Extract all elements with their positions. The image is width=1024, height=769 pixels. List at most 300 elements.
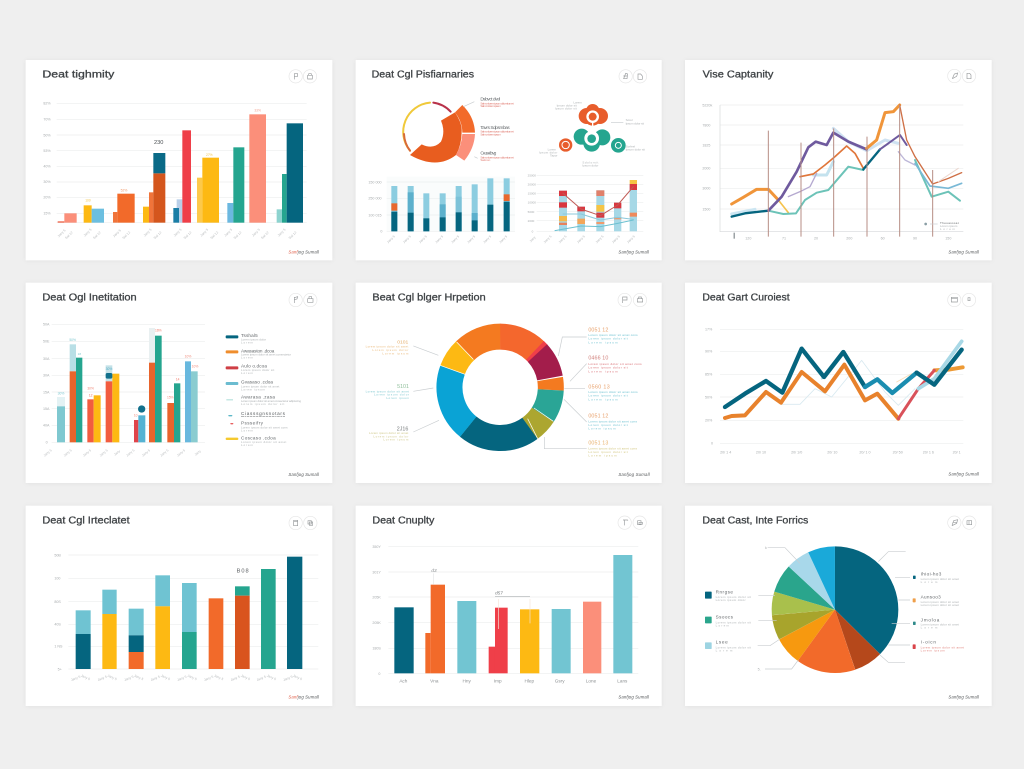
bar chart: Jany 5 bbox=[143, 228, 153, 238]
two-series line chart: 20/ 10 bbox=[756, 450, 766, 454]
callouts left: Lorem ipsum bbox=[383, 438, 409, 442]
stacked bar chart: Jany 5 bbox=[160, 674, 171, 681]
radial chart: Dsbvct dvel bbox=[480, 97, 500, 102]
panel: bottom-right pie chart bbox=[685, 506, 992, 706]
title: Deat Ogl Inetitation bbox=[42, 293, 137, 304]
panel: top-middle mixed charts bbox=[356, 60, 662, 260]
icon buttons bbox=[948, 293, 976, 307]
signature: Sanfjog Sumall bbox=[288, 472, 320, 477]
radial chart: Salmon lorem ipsum dolor sit amet bbox=[480, 101, 514, 105]
grouped bar chart: 30% bbox=[106, 367, 112, 371]
signature: Sanfjog Sumall bbox=[618, 472, 651, 477]
flower diagram: Ipsum dolor sit bbox=[555, 106, 577, 110]
signature: Sanfjog Sumall bbox=[948, 694, 980, 699]
legend right: Lorem ipsum dolor sit amet bbox=[921, 600, 959, 604]
icon buttons bbox=[948, 516, 976, 529]
legend right bbox=[913, 572, 964, 653]
legend right: Jmoloa bbox=[921, 617, 940, 622]
legend right: Ihioi-ho3 bbox=[921, 572, 942, 577]
bar chart: Sat 12 bbox=[183, 230, 193, 240]
stacked bar chart: Jany 5 bbox=[177, 675, 187, 682]
stacked bar chart: Jany 5 bbox=[466, 234, 476, 244]
bar chart: Jany 5 bbox=[277, 228, 287, 238]
stacked bar chart: Jany 5 bbox=[230, 675, 241, 682]
multi-line chart bbox=[702, 103, 963, 240]
callouts right: Lorem ipsum bbox=[588, 454, 617, 458]
callouts right: 0466 10 bbox=[588, 356, 608, 362]
callouts right bbox=[544, 327, 642, 458]
legend right: Lorem ipsum bbox=[921, 649, 945, 653]
signature: Sanfjog Sumall bbox=[288, 249, 320, 254]
legend right: Lorem ipsum dolor sit amet bbox=[921, 577, 959, 581]
bar chart: Imp bbox=[494, 679, 502, 684]
legend right: Aunsoo3 bbox=[921, 595, 941, 600]
stacked bar chart: Jany 5 bbox=[402, 234, 412, 244]
stacked bar chart: 50B bbox=[54, 553, 61, 557]
grouped bar chart: 30A bbox=[43, 374, 50, 378]
legend: Lorem bbox=[241, 443, 253, 447]
title: Beat Cgl blger Hrpetion bbox=[372, 293, 486, 304]
title: Deat Gart Curoiest bbox=[702, 293, 790, 304]
bar chart: Sat 12 bbox=[64, 230, 74, 240]
bar chart: 40% bbox=[43, 164, 51, 168]
icon buttons bbox=[948, 69, 976, 83]
stacked bar chart: Jany 5 bbox=[203, 675, 214, 682]
stacked bar chart: Jany 5 bbox=[133, 674, 144, 681]
bar chart: 205K bbox=[372, 595, 381, 599]
callouts right: Lorem ipsum dolor sit bbox=[588, 423, 628, 427]
bar chart: 230 bbox=[154, 140, 163, 146]
stacked bar and line chart: 0 bbox=[532, 229, 534, 233]
multi-line chart: 200 bbox=[846, 236, 852, 240]
two-series line chart: 85% bbox=[705, 373, 713, 377]
callouts right: Lorem ipsum dolor sit bbox=[588, 366, 628, 370]
flower diagram bbox=[539, 101, 645, 167]
panel: bottom-centre bar chart bbox=[356, 506, 662, 706]
grouped bar chart: 50% bbox=[69, 338, 76, 342]
callouts right: Lorem ipsum bbox=[588, 427, 616, 431]
legend: Lorem ipsum dolor sit amet consectetur adipiscing bbox=[241, 399, 301, 403]
bar chart: Sat 12 bbox=[288, 230, 298, 240]
bar chart: Jany 5 bbox=[223, 228, 233, 238]
stacked bar chart: Jany 5 bbox=[418, 234, 428, 244]
stacked bar chart: Jany 5 bbox=[187, 674, 197, 681]
stacked bar chart: 100 015 bbox=[368, 213, 382, 217]
callouts left: 0101 bbox=[397, 339, 409, 345]
stacked bar and line chart: Jany 5 bbox=[543, 234, 553, 244]
grouped bar chart: Jany bbox=[194, 449, 202, 457]
bar chart: Vna bbox=[430, 679, 439, 684]
two-series line chart: 20/ 1 4 bbox=[720, 450, 731, 454]
grouped bar chart: 50A bbox=[43, 323, 50, 327]
grouped bar chart: Jany 5 bbox=[141, 448, 151, 458]
legend: Lorem ipsum dolor bbox=[241, 338, 266, 342]
stacked bar chart: 80S bbox=[54, 600, 61, 604]
stacked bar and line chart: Jany 5 bbox=[595, 234, 605, 244]
callouts right: Lorem ipsum bbox=[588, 369, 618, 373]
signature: Sanfjog Sumall bbox=[948, 471, 980, 476]
two-series line chart: 20% bbox=[705, 419, 713, 423]
bar chart: d57 bbox=[495, 591, 503, 596]
callouts left: Lorem ipsum dolor bbox=[372, 348, 408, 352]
legend: Lorem ipsum dolor sit amet cons bbox=[241, 425, 288, 429]
bar chart: Jany 5 bbox=[251, 228, 261, 238]
two-series line chart: 20/ 1 0 bbox=[859, 450, 871, 454]
legend right: Lorem ipsum dolor sit amet bbox=[921, 603, 959, 607]
bar chart: Hlep bbox=[525, 679, 535, 684]
legend left: Lorem bbox=[716, 623, 729, 627]
grouped bar chart: 30A bbox=[43, 357, 50, 361]
bar chart: 50% bbox=[43, 133, 51, 137]
legend: Aulo o.dcoa bbox=[241, 364, 267, 369]
legend: Ciasssgnsnotars bbox=[241, 411, 286, 416]
legend left: Rnrgse bbox=[716, 590, 733, 595]
signature: Sanfjog Sumall bbox=[948, 249, 980, 254]
legend left: Ssoocs bbox=[716, 615, 734, 620]
stacked bar and line chart: Jany bbox=[529, 235, 537, 243]
callouts left: Lorem ipsum dolor sit amet bbox=[369, 431, 408, 435]
stacked bar chart: 0 bbox=[380, 230, 382, 234]
stacked bar chart: Jany 5 bbox=[150, 675, 161, 682]
legend: Awasaston .dcoa bbox=[241, 348, 275, 353]
stacked bar and line chart: 20000 bbox=[528, 183, 536, 187]
flower diagram: Sorel bbox=[626, 118, 633, 122]
panel: top-right line chart bbox=[685, 60, 992, 260]
donut chart bbox=[429, 316, 572, 459]
stacked bar and line chart: 25000 bbox=[528, 174, 536, 178]
radial chart: Cvusvt bvg bbox=[480, 151, 497, 156]
panel: middle-right line chart bbox=[685, 283, 992, 483]
stacked bar and line chart: 5000 bbox=[528, 210, 535, 214]
flower diagram: Tapor bbox=[550, 154, 557, 158]
stacked bar chart: Jany 5 bbox=[498, 234, 508, 244]
legend: Lorem ipsum dolor sit amet bbox=[241, 384, 279, 388]
icon buttons bbox=[618, 516, 646, 529]
bar chart: Sat 12 bbox=[260, 230, 270, 240]
stacked bar chart: Jany 5 bbox=[80, 674, 91, 681]
callouts left: Lorem ipsum bbox=[382, 351, 409, 355]
legend: Awarasa .zasa bbox=[241, 395, 275, 400]
two-series line chart: 0 bbox=[711, 441, 713, 445]
stacked bar chart: Jany 5 bbox=[482, 234, 492, 244]
title: Deat Cgl Irteclatet bbox=[42, 516, 130, 527]
title: Vise Captanity bbox=[703, 69, 773, 80]
grouped bar chart: 10% bbox=[185, 354, 191, 358]
callouts left: Lorem ipsum dolor bbox=[374, 393, 409, 397]
bar chart: Jany 5 bbox=[83, 228, 93, 238]
multi-line chart: 71 bbox=[782, 236, 786, 240]
flower diagram: Sorfeel bbox=[626, 145, 635, 149]
stacked bar chart bbox=[368, 177, 515, 244]
radial chart: Salmon bbox=[480, 158, 491, 162]
bar chart: Gsry bbox=[555, 679, 565, 684]
radial chart: Tavrs Sdpsmbas bbox=[480, 125, 510, 130]
legend right: Lorem bbox=[921, 580, 938, 584]
bar chart: 180S bbox=[372, 647, 381, 651]
legend left: k bbox=[765, 546, 767, 550]
bar chart: 20% bbox=[43, 196, 51, 200]
stacked bar chart: Jany 5 bbox=[283, 675, 293, 682]
flower diagram: Ipsum dolor sit bbox=[626, 148, 645, 152]
grouped bar chart: Jany bbox=[113, 449, 121, 457]
bar chart: 0 bbox=[378, 672, 380, 676]
stacked bar and line chart: Jany 5 bbox=[611, 234, 621, 244]
stacked bar and line chart: 2000 bbox=[528, 219, 535, 223]
bar chart: Lone bbox=[586, 679, 597, 684]
title: Deat Cast, Inte Forrics bbox=[702, 516, 808, 527]
grouped bar chart: Jany 5 bbox=[82, 448, 92, 458]
grouped bar chart: 12 bbox=[89, 394, 93, 398]
callouts right: Lorem ipsum dolor sit amet cons bbox=[588, 419, 637, 423]
grouped bar chart: Jany 5 bbox=[63, 448, 73, 458]
panel: middle-left bar chart with legend bbox=[26, 283, 332, 483]
callouts right: Lorem ipsum dolor sit amet cons bbox=[588, 333, 638, 337]
multi-line chart: 5220k bbox=[702, 103, 712, 107]
multi-line chart: 7800 bbox=[702, 124, 710, 128]
bar chart: d3 bbox=[431, 568, 437, 573]
two-series line chart: 50% bbox=[705, 395, 713, 399]
bar chart: Jany 5 bbox=[199, 228, 209, 238]
legend left: Lorem ipsum dolor sit bbox=[716, 645, 751, 649]
multi-line chart: Lorem bbox=[940, 227, 955, 231]
multi-line chart: 2000 bbox=[702, 167, 710, 171]
multi-line chart: 20 bbox=[814, 236, 818, 240]
stacked bar and line chart: 15000 bbox=[528, 192, 536, 196]
two-series line chart: 20/ 10 bbox=[827, 450, 837, 454]
stacked bar and line chart: 10000 bbox=[528, 201, 536, 205]
legend right: Lorem ipsum dolor sit amet bbox=[921, 645, 964, 649]
grouped bar chart: 15A bbox=[43, 390, 50, 394]
stacked bar chart: 250 000 bbox=[368, 197, 382, 201]
stacked bar chart: Jany 5 bbox=[292, 674, 303, 681]
legend: Pssseifry bbox=[241, 420, 264, 425]
multi-line chart: 1825 bbox=[702, 144, 710, 148]
stacked bar and line chart: Jany 5 bbox=[576, 234, 586, 244]
callouts left: 2J16 bbox=[397, 427, 408, 433]
icon buttons bbox=[289, 293, 317, 307]
stacked bar chart: Jany 5 bbox=[70, 675, 81, 682]
legend: Lorem ipsum dolor sit bbox=[241, 368, 274, 372]
stacked bar chart: Jany 5 bbox=[124, 675, 134, 682]
legend bbox=[226, 333, 301, 447]
stacked bar chart: 1 NS bbox=[54, 645, 63, 649]
two-series line chart: 20/ 1 bbox=[953, 450, 961, 454]
callouts right: Lorem ipsum bbox=[588, 397, 618, 401]
stacked bar chart bbox=[54, 553, 318, 682]
callouts left: Lorem ipsum dolor sit amet bbox=[366, 345, 408, 349]
title: Deat Cgl Pisfiarnaries bbox=[372, 69, 474, 80]
flower diagram: Lorem bbox=[548, 148, 557, 152]
bar chart bbox=[372, 545, 638, 684]
radial chart: Salmon lorem ipsum bbox=[480, 104, 501, 108]
leader lines bbox=[758, 548, 910, 669]
grouped bar chart: 10 bbox=[134, 414, 138, 418]
legend: Lorem bbox=[241, 356, 253, 360]
flower diagram: Lorem bbox=[573, 101, 582, 105]
stacked bar and line chart: Jany 5 bbox=[558, 234, 568, 244]
bar chart: Sat 12 bbox=[92, 230, 102, 240]
two-series line chart: 90% bbox=[705, 350, 713, 354]
grouped bar chart: 0 bbox=[46, 441, 48, 445]
panel: top-left bar chart bbox=[26, 60, 332, 260]
stacked bar chart: Jany 5 bbox=[213, 674, 224, 681]
stacked bar chart: Jany 5 bbox=[386, 234, 396, 244]
multi-line chart: 60 bbox=[881, 236, 885, 240]
stacked bar chart: 100 bbox=[54, 577, 60, 581]
stacked bar chart: 150 000 bbox=[368, 180, 382, 184]
legend left: Lorem bbox=[716, 648, 733, 652]
stacked bar chart: Jany 5 bbox=[266, 674, 277, 681]
grouped bar chart: 50E bbox=[43, 340, 50, 344]
legend: Coscaso .cdoa bbox=[241, 435, 276, 440]
flower diagram: Ipsum dolor sit bbox=[626, 121, 644, 125]
callouts left bbox=[366, 339, 439, 442]
bar chart: 33% bbox=[254, 109, 261, 113]
panel: middle-centre donut chart bbox=[356, 283, 662, 483]
grouped bar chart: Jany 5 bbox=[159, 448, 170, 458]
two-series line chart bbox=[705, 328, 963, 454]
bar chart: Jany 5 bbox=[112, 228, 122, 238]
grouped bar chart: Jany 5 bbox=[43, 448, 53, 458]
grouped bar chart: 14 bbox=[176, 377, 180, 381]
radial chart: Salmon lorem ipsum dolor sit amet bbox=[480, 155, 514, 159]
callouts right: 0051 12 bbox=[588, 413, 608, 419]
legend: Tsshal5 bbox=[241, 333, 258, 338]
icon buttons bbox=[618, 293, 647, 307]
bar chart: Sat 12 bbox=[153, 230, 163, 240]
legend left: Lorem ipsum dolor sit bbox=[716, 620, 751, 624]
legend right: I-oicn bbox=[921, 640, 936, 645]
callouts right: Lorem ipsum dolor sit bbox=[588, 337, 628, 341]
flower diagram: Sdolorsit bbox=[582, 160, 598, 164]
grouped bar chart: 15% bbox=[167, 396, 174, 400]
stacked bar chart: Jany 5 bbox=[97, 675, 108, 682]
bar chart: 27% bbox=[206, 153, 213, 157]
bar chart: 70% bbox=[43, 117, 51, 121]
bar chart: 53% bbox=[43, 149, 51, 153]
callouts right: Lorem ipsum dolor sit bbox=[588, 450, 628, 454]
callouts right: Lorem ipsum dolor sit bbox=[588, 394, 628, 398]
callouts right: Lorem ipsum bbox=[588, 340, 618, 344]
legend left bbox=[705, 546, 767, 671]
pie chart bbox=[790, 565, 880, 654]
callouts left: 5101 bbox=[397, 384, 409, 390]
grouped bar chart bbox=[43, 323, 205, 458]
bar chart: Sat 12 bbox=[209, 230, 219, 240]
bar chart: 15% bbox=[43, 212, 51, 216]
callouts right: 0560 13 bbox=[588, 384, 610, 390]
panel: bottom-left stacked bars bbox=[26, 506, 332, 706]
bar chart: 82% bbox=[43, 102, 51, 106]
bar chart: Sat 12 bbox=[233, 230, 243, 240]
signature: Sanfjog Sumall bbox=[618, 249, 650, 254]
callouts right: Lorem ipsum dolor sit amet cons bbox=[588, 362, 642, 366]
legend: Lorem ipsum dolor sit amet bbox=[241, 440, 286, 444]
two-series line chart: 20/ 50 bbox=[893, 450, 903, 454]
icon buttons bbox=[619, 70, 647, 83]
callouts right: Lorem ipsum dolor sit amet cons bbox=[588, 390, 638, 394]
bar chart: 52% bbox=[121, 188, 127, 192]
legend: Lorem bbox=[241, 428, 253, 432]
flower diagram: Ipsum dolor bbox=[582, 163, 598, 167]
bar chart: 350Y bbox=[372, 545, 381, 549]
callouts right: Lorem ipsum dolor sit amet cons bbox=[588, 446, 637, 450]
grouped bar chart: 30% bbox=[87, 386, 94, 390]
callouts left: Lorem ipsum dolor bbox=[373, 434, 408, 438]
legend left: 5. bbox=[758, 667, 761, 671]
bar chart: 205K bbox=[372, 621, 381, 625]
bar chart: 30% bbox=[43, 180, 51, 184]
stacked bar chart: 40S bbox=[54, 623, 61, 627]
two-series line chart: 20/ 1/0 bbox=[791, 450, 802, 454]
legend: Lorem bbox=[241, 371, 253, 375]
bar chart: Lans bbox=[617, 679, 628, 684]
grouped bar chart: 15A bbox=[43, 407, 50, 411]
multi-line chart: 1500 bbox=[702, 207, 710, 211]
bar chart: 301Y bbox=[372, 570, 381, 574]
stacked bar chart: B08 bbox=[237, 569, 249, 575]
multi-line chart: 3000 bbox=[702, 187, 710, 191]
signature: Sanfjog Sumall bbox=[288, 694, 320, 699]
bar chart: 100 bbox=[85, 198, 91, 202]
bar chart: Jany 5 bbox=[57, 228, 67, 238]
bar chart: Sat 12 bbox=[121, 230, 131, 240]
radial chart: Salmon lorem ipsum bbox=[480, 132, 501, 136]
multi-line chart: 120 bbox=[745, 236, 751, 240]
grouped bar chart: 40A bbox=[43, 424, 50, 428]
multi-line chart: Theuasssat bbox=[940, 221, 959, 225]
legend: Lorem ipsum bbox=[241, 387, 265, 391]
stacked bar chart: Jany 5 bbox=[240, 674, 251, 681]
stacked bar and line chart bbox=[528, 174, 643, 244]
legend: Lorem ipsum dolor sit amet consectetur bbox=[241, 353, 291, 357]
callouts left: Lorem ipsum bbox=[386, 396, 409, 400]
stacked bar and line chart: Jany 5 bbox=[626, 234, 636, 244]
title: Deat Cnuplty bbox=[372, 516, 434, 527]
stacked bar chart: Jany 5 bbox=[256, 675, 267, 682]
grouped bar chart: Jany 5 bbox=[176, 448, 186, 458]
legend: Lorem bbox=[241, 341, 253, 345]
signature: Sanfjog Sumall bbox=[618, 694, 650, 699]
stacked bar chart: Jany 5 bbox=[434, 234, 444, 244]
legend right: Lorem bbox=[921, 626, 938, 630]
legend: Gvasaso .cdoa bbox=[241, 380, 273, 385]
radial chart: Salmon lorem ipsum dolor sit amet bbox=[480, 130, 514, 134]
grouped bar chart: 30% bbox=[58, 392, 64, 396]
stacked bar chart: 5+ bbox=[58, 667, 62, 671]
legend: Lorem ipsum dolor sit bbox=[241, 402, 284, 406]
bar chart: Ach bbox=[399, 679, 408, 684]
icon buttons bbox=[289, 70, 317, 83]
grouped bar chart: Jany 5 bbox=[125, 448, 136, 458]
grouped bar chart: 18 bbox=[78, 352, 81, 356]
bar chart: Hny bbox=[463, 679, 471, 684]
radial chart bbox=[403, 97, 514, 162]
grouped bar chart: 10% bbox=[192, 365, 198, 369]
stacked bar chart: Jany 5 bbox=[450, 234, 460, 244]
grouped bar chart: 16% bbox=[155, 329, 162, 333]
flower diagram: Ipsum dolor sit bbox=[557, 104, 577, 108]
two-series line chart: 20/ 1 6 bbox=[923, 450, 934, 454]
callouts left: Lorem ipsum dolor sit amet bbox=[366, 389, 409, 393]
multi-line chart: Lorem ipsum bbox=[940, 224, 958, 228]
legend left: Lsee bbox=[716, 640, 728, 645]
bar chart: Jany 5 bbox=[173, 228, 183, 238]
multi-line chart: 90 bbox=[913, 236, 917, 240]
callouts right: 0051 12 bbox=[588, 327, 608, 333]
legend left: Lorem ipsum dolor bbox=[716, 598, 746, 602]
two-series line chart: 17% bbox=[705, 328, 713, 332]
